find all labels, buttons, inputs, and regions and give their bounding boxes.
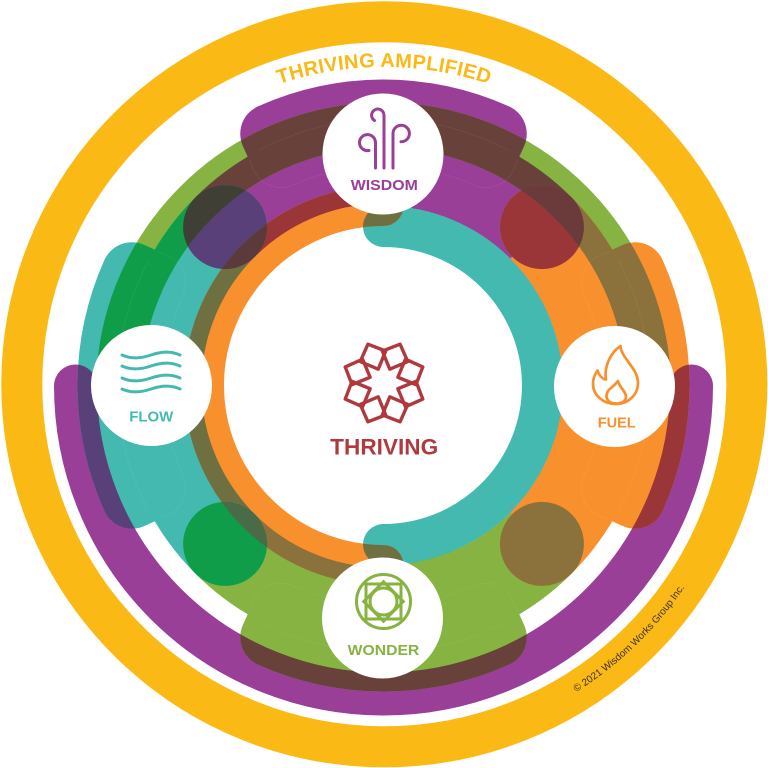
overlap: purple, teal and orange xyxy=(222,224,267,270)
flow label: FLOW xyxy=(129,409,174,426)
icon: squared circle xyxy=(356,574,410,628)
node: flow xyxy=(91,325,212,446)
fuel label: FUEL xyxy=(598,414,636,431)
overlap: purple and green xyxy=(195,104,572,692)
overlap: purple and teal xyxy=(77,226,542,544)
node: wonder xyxy=(322,558,443,678)
wisdom white disc xyxy=(322,94,444,214)
overlap: green and teal xyxy=(77,226,542,544)
wonder green bands xyxy=(118,125,648,692)
overlap: purple, green and teal xyxy=(183,185,246,246)
wonder label: WONDER xyxy=(348,642,419,659)
fuel orange bands xyxy=(204,206,690,565)
faint band outlines xyxy=(117,119,650,652)
node: fuel xyxy=(554,326,675,447)
node: wisdom xyxy=(322,94,444,214)
overlap: green and orange xyxy=(204,206,690,565)
wisdom purple bands xyxy=(76,79,692,694)
overlap: purple and orange xyxy=(254,190,690,529)
centre: thriving xyxy=(330,339,438,460)
wisdom label: WISDOM xyxy=(351,177,418,194)
icon: thriving flower xyxy=(340,339,428,427)
overlap: teal and orange xyxy=(190,211,561,562)
overlap: green, teal and orange xyxy=(222,502,267,548)
icon: wisdom stems xyxy=(360,109,409,168)
copyright notice: © 2021 Wisdom Works Group Inc. xyxy=(574,587,684,691)
flow white disc xyxy=(91,325,212,446)
icon: flame xyxy=(593,346,638,404)
icon: water waves xyxy=(122,352,180,392)
thriving label: THRIVING xyxy=(330,434,438,460)
flow teal bands xyxy=(77,226,542,544)
wonder white disc xyxy=(322,558,443,678)
fuel white disc xyxy=(554,326,675,447)
overlapping ring system xyxy=(76,79,692,694)
overlap: purple, green and orange xyxy=(522,185,584,246)
heading: thriving amplified: THRIVING AMPLIFIED xyxy=(275,53,490,83)
